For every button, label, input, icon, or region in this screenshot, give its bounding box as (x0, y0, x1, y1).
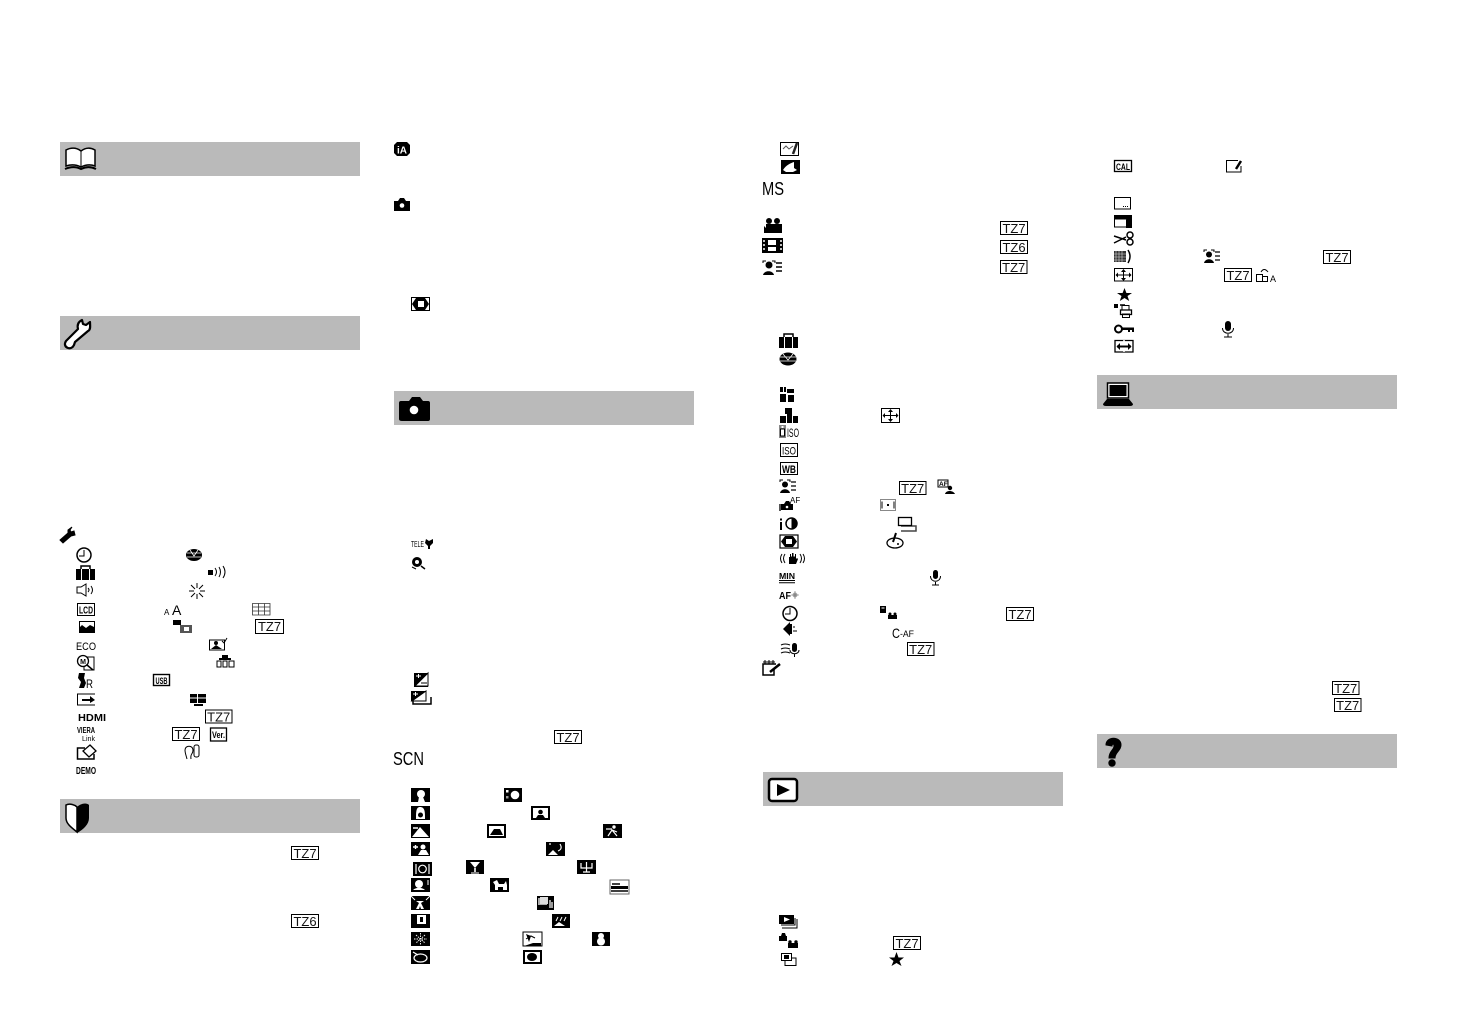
icon: AF assist (779, 591, 799, 602)
scene: candle (577, 860, 596, 874)
icon: playback stack (779, 915, 797, 928)
scene: sports (603, 824, 622, 838)
icon: picture (79, 621, 95, 633)
icon: iA mode (394, 142, 410, 156)
icon: font size A: A (164, 608, 170, 617)
tag: TZ7: TZ7 (1002, 260, 1025, 275)
icon: USB box: USB (156, 676, 168, 686)
icon: world time (780, 352, 796, 366)
scene: portrait (411, 788, 430, 802)
icon: rotate R: R (86, 677, 93, 691)
icon: picture size (780, 387, 794, 402)
icon: eraser (78, 745, 96, 759)
icon: microphone (1222, 321, 1234, 337)
icon: stabilizer hand (780, 553, 804, 564)
scene: pinhole (411, 950, 430, 964)
header bar: beginner section (60, 799, 360, 833)
tag: TZ7: TZ7 (1334, 681, 1357, 696)
tag: TZ7: TZ7 (556, 730, 580, 745)
icon: metering box (412, 298, 430, 310)
icon: camera mode (394, 198, 410, 211)
icon: camera plus video (779, 933, 798, 948)
icon: movie camera (764, 218, 782, 233)
scene: hi-speed burst (411, 914, 430, 928)
icon: clock (783, 606, 797, 620)
icon: face recognition (1204, 250, 1220, 263)
scene: beach (523, 932, 542, 946)
icon: face recognition (763, 261, 782, 275)
icon: favorite star (889, 952, 904, 966)
icon: auto rotate: A (1270, 274, 1277, 285)
icon: palette (887, 533, 903, 548)
icon: ISO box (780, 444, 798, 458)
tag: TZ7: TZ7 (258, 619, 281, 634)
icon: wind cut mic (781, 643, 799, 657)
icon: metering (780, 535, 798, 548)
icon: conversion lens (783, 622, 797, 636)
scene: snow (592, 932, 610, 946)
icon: intelligent ISO (779, 425, 799, 440)
icon: clock (77, 548, 91, 562)
icon: VIERA Link: Link (82, 736, 96, 743)
icon: notepad (763, 660, 780, 675)
icon: auto bracket (411, 691, 431, 704)
icon: scissors (1114, 232, 1133, 245)
scene: party (466, 860, 484, 874)
icon: zoom macro (412, 557, 425, 569)
icon: beep (208, 566, 225, 578)
icon: burst frames (898, 518, 916, 531)
panel: column 2 (393, 142, 694, 964)
icon: protect key (1115, 326, 1134, 332)
icon: continuous AF (892, 625, 914, 641)
icon: font size A: A (172, 602, 182, 618)
header bar: camera section (394, 391, 694, 425)
icon: LCD box (78, 604, 94, 616)
icon: sparkle (189, 583, 205, 599)
icon: arrows box (882, 408, 900, 422)
scene: pet (490, 878, 509, 892)
tag: TZ7: TZ7 (1325, 250, 1349, 265)
icon: calendar: CAL (1116, 162, 1130, 173)
tag: TZ7: TZ7 (895, 936, 919, 951)
icon: photo frame pen (780, 142, 798, 156)
icon: suitcase (76, 566, 95, 580)
scene: scenery (411, 824, 430, 838)
icon: monitor (190, 694, 206, 705)
icon: fish (781, 160, 800, 174)
tag: TZ6: TZ6 (293, 914, 317, 929)
icon: ISO box: ISO (782, 446, 796, 458)
icon: print (1114, 304, 1132, 318)
icon: resize grid (1114, 250, 1130, 263)
icon: suitcase (779, 334, 798, 348)
icon: AF assist: AF (779, 591, 791, 602)
scene: soft portrait B (504, 788, 522, 802)
icon: magnifier M: M (80, 659, 86, 666)
icon: star (1117, 288, 1132, 301)
icon: VIERA Link: VIERA (77, 726, 95, 735)
tag: TZ7: TZ7 (293, 846, 317, 861)
header bar: computer section (1097, 375, 1397, 409)
tag: TZ7: TZ7 (1336, 698, 1359, 713)
icon: small playback frames (782, 954, 796, 966)
icon: font size A (164, 602, 182, 618)
scene: sunset (610, 880, 629, 894)
icon: face recognition (780, 480, 796, 493)
header bar: playback section (763, 772, 1063, 806)
scene: photo frame (523, 950, 542, 964)
icon: arrows box (1114, 268, 1132, 281)
scene mode icons (411, 788, 629, 964)
icon: picture check (210, 638, 227, 650)
icon: film (762, 238, 783, 253)
icon: AF face (938, 480, 955, 494)
tag: TZ7: TZ7 (174, 727, 198, 742)
icon: world time (186, 549, 202, 561)
tag: TZ6: TZ6 (1002, 240, 1026, 255)
icon: DEMO: DEMO (76, 766, 96, 777)
scene: panorama (487, 824, 506, 838)
icon: grid (252, 604, 270, 615)
header bar: book section (60, 142, 360, 176)
icon: copy arrows box (1115, 340, 1133, 352)
icon: microphone (930, 570, 940, 585)
scene: fireworks (411, 932, 430, 946)
icon: ECO: ECO (76, 641, 96, 653)
icon: ear (185, 745, 199, 759)
header bar: troubleshooting section (1097, 734, 1397, 768)
scene: soft skin (411, 806, 430, 820)
panel: column 3 (762, 142, 1063, 966)
icon: WB box: WB (782, 464, 796, 476)
icon: HDMI: HDMI (78, 712, 106, 724)
icon: rotate R (78, 673, 93, 691)
icon: continuous AF: C (892, 625, 900, 641)
icon: video mode box (173, 620, 192, 633)
icon: date video (880, 606, 897, 619)
icon: quick AF (780, 496, 800, 511)
icon: folder bars (217, 655, 234, 667)
panel: column 1 (60, 142, 360, 929)
icon: edit box (1226, 160, 1241, 172)
icon: magnifier M (78, 656, 94, 670)
scene: baby (411, 878, 430, 892)
icon: intelligent ISO: ISO (787, 426, 799, 440)
scene: night scenery (546, 842, 565, 856)
icon: Ver. box (210, 728, 226, 741)
icon: exposure (414, 673, 428, 687)
scene: starry sky (552, 914, 570, 928)
tag: TZ7: TZ7 (901, 481, 924, 496)
heading icon: MS: MS (762, 179, 784, 199)
icon: tele macro: TELE (411, 540, 424, 549)
tag: TZ7: TZ7 (207, 710, 230, 724)
icon: Ver. box: Ver. (212, 730, 225, 741)
tag: TZ7: TZ7 (1002, 221, 1026, 236)
icon: VIERA Link (77, 726, 96, 743)
icon: min shutter: MIN (779, 571, 795, 581)
tag: TZ7: TZ7 (1226, 268, 1250, 283)
scene: food (413, 862, 432, 876)
header bar: setup wrench section (60, 316, 360, 350)
scene: flash burst (537, 896, 554, 910)
icon: AF face: AF (939, 481, 948, 488)
icon: output arrow box (78, 694, 95, 705)
icon: small wrench (60, 527, 75, 543)
tag: TZ7: TZ7 (909, 642, 932, 657)
panel: column 4 (1097, 160, 1397, 768)
icon: LCD box: LCD (79, 606, 93, 616)
icon: iA mode: iA (397, 146, 407, 156)
icon: text stamp (1114, 215, 1132, 228)
scene: high sensitivity (411, 896, 430, 910)
icon: auto rotate (1256, 270, 1277, 285)
tag: TZ7: TZ7 (1008, 607, 1032, 622)
heading icon: SCN: SCN (393, 749, 424, 769)
icon: intelligent exposure (780, 518, 797, 530)
icon: AF mode (780, 408, 798, 423)
icon: quick AF: AF (790, 496, 800, 505)
scene: night portrait (411, 842, 430, 856)
icon: spot focus box (880, 500, 896, 510)
icon: speaker (77, 584, 92, 596)
scene: self portrait (531, 806, 550, 820)
icon: continuous AF: -AF (900, 629, 914, 640)
icon: calendar (1114, 160, 1132, 173)
icon: USB box (154, 674, 170, 686)
icon: title text box (1114, 198, 1130, 209)
